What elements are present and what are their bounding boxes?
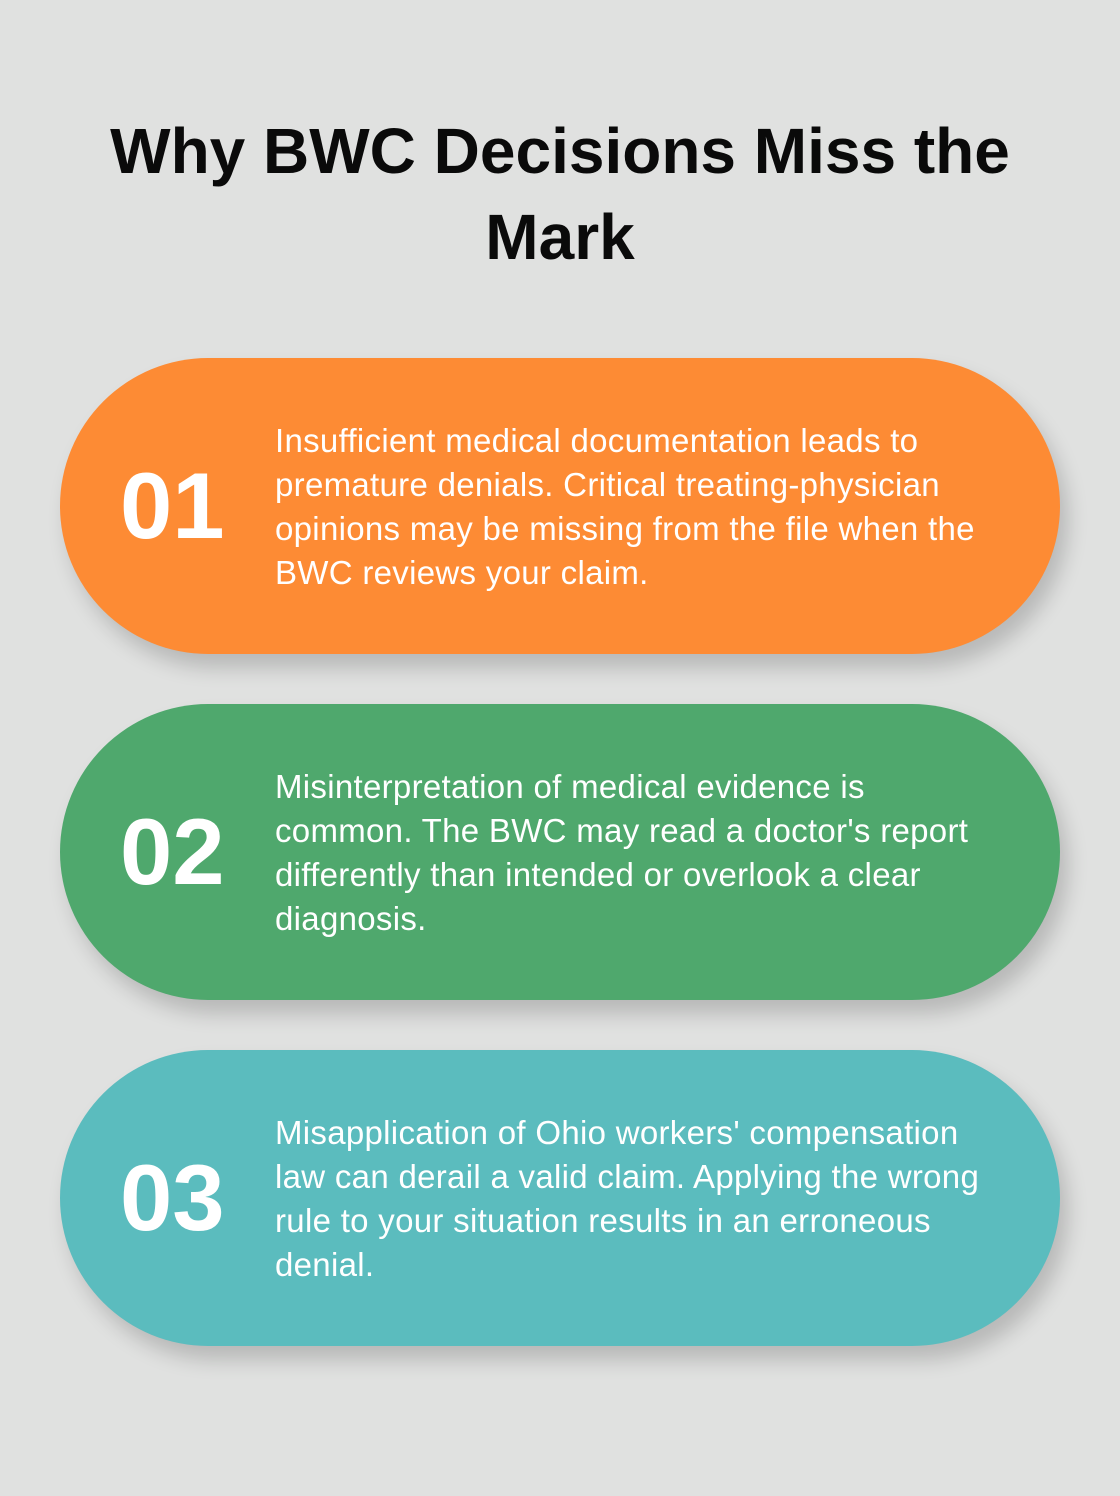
text 03 (275, 1114, 979, 1283)
text 01: premature denials. Critical treating-physician (275, 466, 940, 503)
text 02 (275, 768, 968, 937)
number 03: 03 (120, 1145, 225, 1250)
title (110, 115, 1010, 273)
title: Mark (485, 201, 635, 273)
text 01: opinions may be missing from the file when the (275, 510, 975, 547)
number 01: 01 (120, 453, 225, 558)
text 01: BWC reviews your claim. (275, 554, 649, 591)
text 02: common. The BWC may read a doctor's report (275, 812, 968, 849)
text 02: diagnosis. (275, 900, 427, 937)
text 02: differently than intended or overlook a clear (275, 856, 921, 893)
text 02: Misinterpretation of medical evidence is (275, 768, 865, 805)
text 03: Misapplication of Ohio workers' compensation (275, 1114, 958, 1151)
text 01: Insufficient medical documentation leads to (275, 422, 918, 459)
panel: 02 (60, 704, 1060, 1000)
text 03: rule to your situation results in an erroneous (275, 1202, 931, 1239)
text 01 (275, 422, 975, 591)
panel: 03 (60, 1050, 1060, 1346)
text 03: law can derail a valid claim. Applying the wrong (275, 1158, 979, 1195)
number 02: 02 (120, 799, 225, 904)
title: Why BWC Decisions Miss the (110, 115, 1010, 187)
text 03: denial. (275, 1246, 374, 1283)
panel: 01 (60, 358, 1060, 654)
